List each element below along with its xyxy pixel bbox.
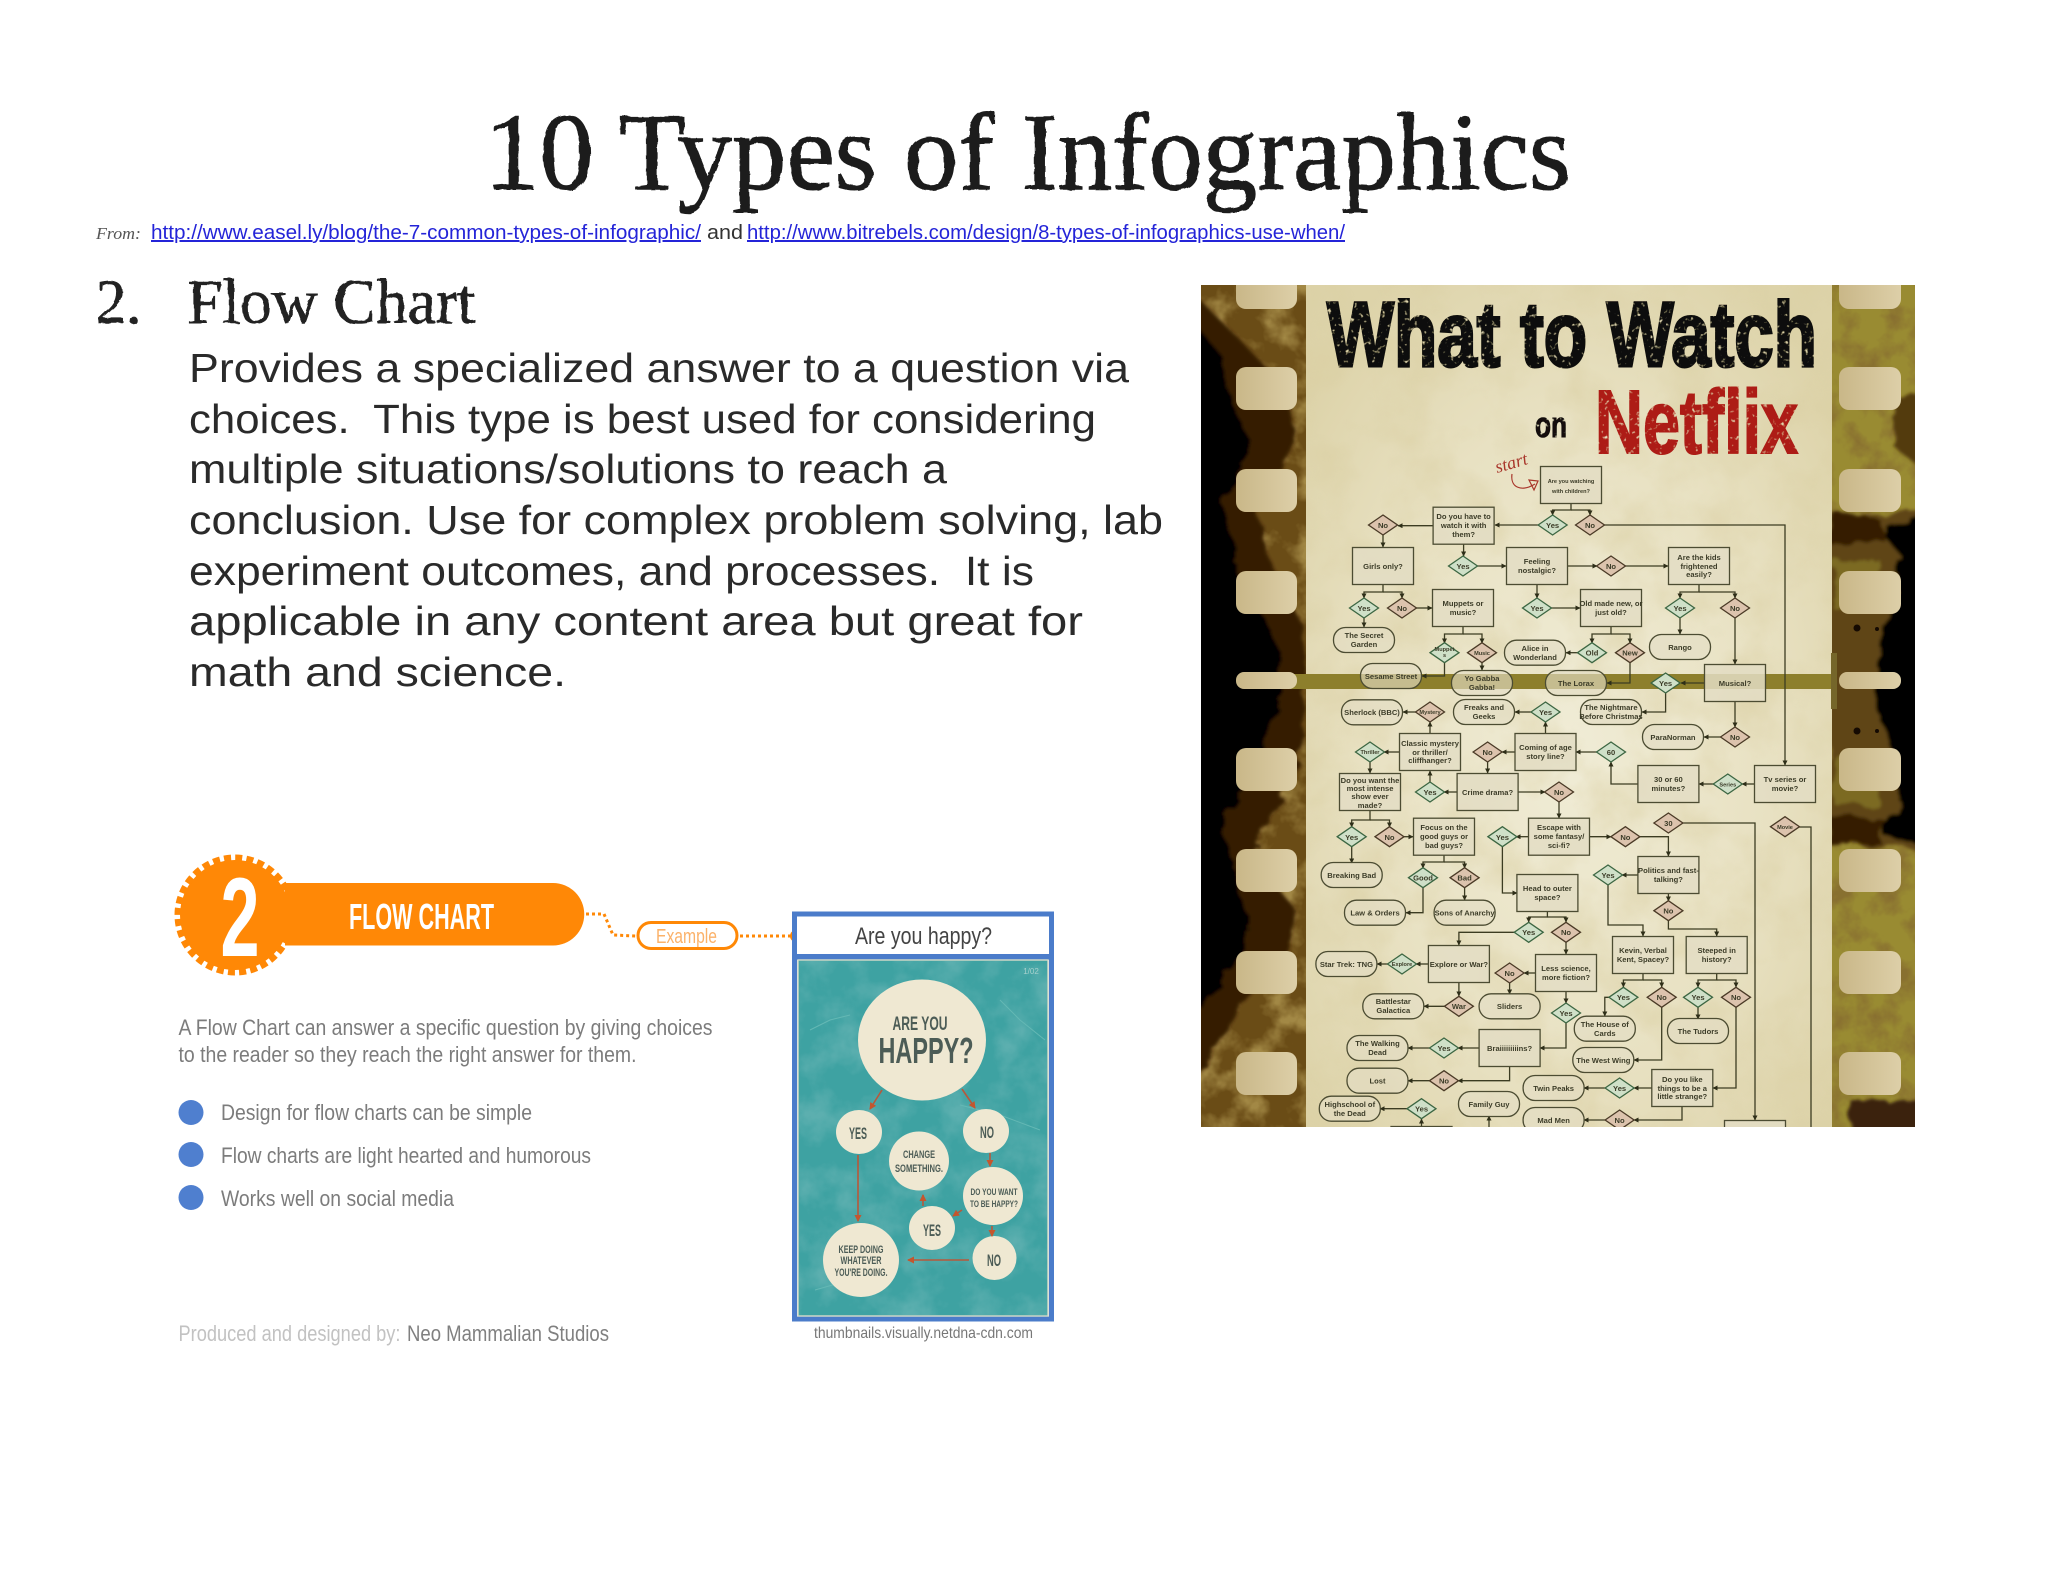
panel: flow chart explainer (178, 855, 1052, 1346)
flow chart: nodes: nostalgic? (1518, 566, 1556, 575)
flow chart: nodes: No (1657, 993, 1667, 1002)
flow chart: nodes: Alice in (1521, 644, 1549, 653)
flow chart: nodes: Yes (1415, 1104, 1428, 1114)
flow chart: nodes: Yes (1539, 708, 1552, 717)
flow chart: nodes: 30 (1664, 819, 1673, 828)
flow chart: nodes: Yes (1423, 788, 1437, 797)
flow chart: nodes: No (1731, 993, 1741, 1002)
callout: example pill: Example (656, 926, 717, 948)
flow chart: connectors (1352, 503, 1811, 1135)
flow poster labels: KEEP DOING (838, 1244, 884, 1256)
flow chart: nodes: just old? (1594, 608, 1627, 617)
source line with links (95, 222, 1345, 244)
flow chart: nodes: Yes (1691, 993, 1705, 1002)
title: 10 Types of Infographics (485, 91, 1571, 213)
flow chart: nodes: Freaks and (1464, 703, 1504, 712)
flow chart: nodes: story line? (1526, 752, 1565, 761)
body text: choices. This type is best used for considering (189, 396, 1096, 442)
flow chart: nodes: them? (1452, 530, 1475, 539)
body text: experiment outcomes, and processes. It is (189, 548, 1034, 594)
flow chart: nodes: history? (1702, 955, 1732, 964)
flow chart: nodes: War (1452, 1002, 1466, 1011)
body text: applicable in any content area but great for (189, 598, 1083, 644)
example poster: are you happy (794, 914, 1052, 1319)
flow chart: nodes: No (1554, 788, 1564, 797)
flow chart: nodes: sci-fi? (1548, 841, 1571, 850)
flow chart: nodes: The West Wing (1576, 1056, 1631, 1065)
flow chart: nodes: The Lorax (1558, 679, 1595, 688)
panel: what to watch on netflix poster (1190, 265, 1925, 1164)
bullet list: Flow charts are light hearted and humorous (221, 1143, 591, 1168)
flow poster labels: SOMETHING. (895, 1163, 943, 1175)
flow chart: nodes: 60 (1607, 748, 1615, 757)
flow chart: nodes: Yes (1659, 679, 1672, 688)
flow chart: nodes: show ever (1351, 792, 1389, 801)
flow chart: nodes: The Secret (1345, 631, 1384, 640)
flow chart: nodes: things to be a (1658, 1084, 1708, 1093)
badge: number 2 starburst and bar: 2 (220, 855, 260, 980)
description text: to the reader so they reach the right answer for them. (178, 1042, 636, 1067)
source line with links: http://www.easel.ly/blog/the-7-common-types-of-infographic/ (151, 222, 701, 244)
flow chart: nodes: No (1615, 1116, 1625, 1125)
flow chart: nodes: Sliders (1497, 1002, 1522, 1011)
flow chart: nodes: No (1505, 969, 1515, 978)
flow chart: nodes: Star Trek: TNG (1320, 960, 1373, 969)
description text (178, 1015, 712, 1067)
flow chart: nodes: Braiiiiiiiiins? (1487, 1044, 1533, 1053)
body text (189, 345, 1163, 695)
flow poster labels: YES (923, 1221, 941, 1240)
badge: number 2 starburst and bar: FLOW CHART (349, 896, 494, 937)
flow chart: nodes: music? (1450, 608, 1477, 617)
description text: A Flow Chart can answer a specific question by giving choices (178, 1015, 712, 1040)
flow chart: nodes: Musical? (1719, 679, 1752, 688)
flow chart: nodes: No (1483, 748, 1493, 757)
flow poster labels: ARE YOU (892, 1014, 948, 1035)
flow chart: nodes: movie? (1772, 784, 1799, 793)
flow chart: nodes: Battlestar (1376, 997, 1411, 1006)
flow chart: nodes: Garden (1351, 640, 1378, 649)
flow chart: nodes: little strange? (1657, 1092, 1708, 1101)
source line with links: From: (95, 224, 141, 243)
flow chart: nodes: with children? (1551, 489, 1591, 495)
flow chart: nodes: The Tudors (1678, 1027, 1718, 1036)
image source caption: thumbnails.visually.netdna-cdn.com (814, 1325, 1033, 1342)
heading: 2. Flow Chart: 2. (96, 266, 141, 337)
flow chart: nodes: No (1730, 733, 1740, 742)
flow chart: nodes: New (1622, 648, 1638, 658)
flow chart: nodes: Movie (1777, 825, 1793, 831)
flow chart: nodes: Yes (1522, 928, 1535, 937)
flow chart: nodes: Bad (1457, 874, 1472, 882)
flow chart: nodes: most intense (1347, 784, 1393, 793)
flow poster labels: CHANGE (903, 1149, 935, 1161)
flow chart: nodes: easily? (1686, 570, 1712, 579)
film sprocket holes (1236, 265, 1901, 1095)
flow chart: nodes: Music (1474, 651, 1490, 657)
flow chart: nodes: Sherlock (BBC) (1344, 708, 1400, 717)
flow chart: nodes: cliffhanger? (1408, 756, 1452, 765)
flow chart: nodes: space? (1534, 893, 1561, 902)
flow chart: nodes: Thriller (1361, 750, 1380, 756)
flow chart: nodes: Mystery (1419, 710, 1441, 716)
flow poster labels: TO BE HAPPY? (970, 1199, 1018, 1209)
heading: 2. Flow Chart: Flow Chart (187, 266, 475, 337)
flow chart: nodes: Good (1413, 874, 1433, 882)
flow chart: nodes: Lost (1369, 1076, 1386, 1086)
flow chart: nodes: Highschool of (1324, 1100, 1376, 1109)
flow chart: nodes: Do you like (1662, 1075, 1703, 1084)
flow chart: nodes: frightened (1680, 562, 1718, 571)
flow chart: nodes: Kevin, Verbal (1619, 946, 1667, 955)
flow chart: nodes: Gabba! (1469, 683, 1495, 692)
flow chart: nodes: Less science, (1541, 964, 1591, 973)
flow chart: nodes: Yes (1617, 993, 1630, 1002)
body text: math and science. (189, 649, 566, 695)
bullet list: Works well on social media (221, 1186, 455, 1211)
flow chart: nodes: Are you watching (1548, 479, 1595, 485)
flow chart: nodes: Yes (1357, 604, 1371, 613)
flow chart: nodes: No (1730, 604, 1740, 613)
flow chart: nodes: s (1443, 653, 1446, 659)
flow poster nodes (823, 980, 1023, 1297)
flow poster labels: YES (849, 1124, 867, 1143)
flow chart: nodes: No (1439, 1076, 1449, 1086)
flow chart: nodes: No (1620, 833, 1631, 842)
credit (178, 1321, 609, 1346)
flow chart: nodes: 30 or 60 (1654, 775, 1683, 784)
flow chart: nodes: Explore or War? (1430, 960, 1488, 969)
flow poster labels: WHATEVER (840, 1255, 882, 1267)
flow chart: nodes: No (1378, 521, 1388, 530)
flow poster labels: HAPPY? (878, 1030, 974, 1071)
flow chart: nodes: Classic mystery (1401, 739, 1460, 748)
flow chart: nodes: Yes (1530, 604, 1544, 613)
flow chart: nodes: No (1384, 833, 1395, 842)
flow chart: nodes: Twin Peaks (1533, 1084, 1574, 1093)
flow chart: nodes: or thriller/ (1412, 748, 1449, 757)
flow chart: nodes: Yes (1673, 604, 1687, 613)
flow chart: nodes: Tv series or (1764, 775, 1806, 784)
badge: number 2 starburst and bar (178, 855, 584, 980)
flow chart: nodes: Kent, Spacey? (1617, 955, 1670, 964)
flow poster labels: YOU'RE DOING. (834, 1267, 888, 1279)
flow chart: nodes: the Dead (1334, 1109, 1366, 1118)
flow chart: nodes: some fantasy/ (1534, 832, 1585, 841)
flow chart: nodes: Are the kids (1677, 553, 1721, 562)
flow chart: nodes: Girls only? (1363, 562, 1403, 571)
flow chart: nodes: good guys or (1420, 832, 1468, 841)
flow chart: nodes: Dead (1368, 1048, 1387, 1057)
flow chart: nodes: Do you want the (1341, 776, 1399, 785)
flow chart: nodes: made? (1358, 801, 1383, 810)
credit: Neo Mammalian Studios (407, 1321, 609, 1346)
start annotation (1496, 454, 1539, 492)
flow chart: nodes: Sesame Street (1365, 672, 1418, 681)
start annotation: start (1493, 448, 1531, 477)
poster title: What to Watch (1327, 284, 1817, 386)
poster title: Netflix (1595, 373, 1798, 473)
flow chart: nodes: The House of (1581, 1020, 1629, 1029)
flow chart: nodes: Cards (1594, 1029, 1616, 1038)
flow chart: nodes: Before Christmas (1579, 712, 1643, 721)
flow chart: nodes: Yes (1559, 1009, 1573, 1018)
flow chart: nodes: Law & Orders (1350, 908, 1400, 918)
flow chart: nodes: Sons of Anarchy (1435, 908, 1495, 918)
flow chart: nodes: Geeks (1473, 712, 1495, 721)
flow poster labels: DO YOU WANT (970, 1187, 1018, 1197)
example poster: are you happy: Are you happy? (855, 923, 992, 950)
flow chart: nodes: Breaking Bad (1327, 871, 1377, 880)
flow chart: nodes: No (1397, 604, 1407, 613)
credit: Produced and designed by: (178, 1321, 400, 1346)
flow chart: nodes: Crime drama? (1462, 788, 1513, 797)
flow chart: nodes: Yes (1496, 833, 1509, 842)
flow chart: nodes (1316, 466, 1816, 1164)
poster title (1326, 298, 1814, 455)
flow chart: nodes: Politics and fast- (1638, 866, 1699, 875)
flow chart: nodes: watch it with (1440, 521, 1487, 530)
flow chart: nodes: bad guys? (1425, 841, 1463, 850)
example poster: are you happy: 1/02 (1023, 967, 1039, 976)
flow chart: nodes: Yes (1613, 1084, 1626, 1093)
flow chart: nodes: Feeling (1524, 557, 1551, 566)
poster title: on (1535, 404, 1567, 445)
flow chart: nodes: Wonderland (1513, 653, 1557, 662)
flow poster arrows (858, 1089, 992, 1260)
flow chart: nodes: Yo Gabba (1465, 674, 1500, 683)
flow chart: nodes: Old (1586, 648, 1599, 658)
source line with links: http://www.bitrebels.com/design/8-types-of-infographics-use-when/ (747, 222, 1345, 244)
flow chart: nodes: Muppet (1435, 647, 1455, 653)
flow chart: nodes: Explore (1392, 962, 1412, 968)
flow chart: nodes: Galactica (1376, 1006, 1411, 1015)
film strip right (1832, 285, 1915, 1127)
flow chart: nodes: Yes (1546, 521, 1559, 530)
icon: connector dot (790, 930, 802, 942)
flow chart: nodes: No (1585, 521, 1595, 530)
flow chart: nodes: The Walking (1355, 1039, 1400, 1048)
flow chart: nodes: Steeped in (1697, 946, 1736, 955)
flow chart: nodes: Muppets or (1443, 599, 1484, 608)
body text: Provides a specialized answer to a question via (189, 345, 1129, 391)
flow chart: nodes: Family Guy (1469, 1100, 1510, 1109)
flow chart: nodes: Series (1719, 782, 1736, 788)
flow chart: nodes: Yes (1456, 562, 1470, 571)
flow poster labels: NO (980, 1123, 994, 1142)
flow chart: nodes: No (1561, 928, 1571, 937)
body text: multiple situations/solutions to reach a (189, 446, 947, 492)
flow chart: nodes: Escape with (1537, 823, 1581, 832)
flow poster labels (834, 1014, 1018, 1279)
connector: dotted line to example (586, 914, 792, 936)
flow poster labels: NO (987, 1251, 1001, 1270)
flow chart: nodes: Yes (1345, 833, 1358, 842)
flow chart: nodes: Do you have to (1436, 512, 1491, 521)
source line with links: and (707, 222, 743, 244)
flow chart: nodes: Head to outer (1523, 884, 1572, 893)
flow chart: nodes: Old made new, or (1579, 599, 1643, 608)
flow chart: nodes: Yes (1601, 871, 1615, 880)
flow chart: nodes: Rango (1668, 643, 1692, 652)
flow chart: nodes: Focus on the (1420, 823, 1468, 832)
flow chart: nodes: Coming of age (1519, 743, 1572, 752)
body text: conclusion. Use for complex problem solving, lab (189, 497, 1163, 543)
flow chart: nodes: No (1663, 906, 1674, 916)
flow chart: nodes: ParaNorman (1650, 733, 1696, 742)
flow chart: nodes: minutes? (1652, 784, 1686, 793)
bullet list: Design for flow charts can be simple (221, 1100, 532, 1125)
bullet list (178, 1100, 591, 1211)
flow chart: nodes: talking? (1654, 875, 1683, 884)
flow chart: nodes: The Nightmare (1584, 703, 1638, 712)
flow chart: nodes: No (1606, 562, 1616, 571)
flow chart: nodes: Mad Men (1537, 1116, 1570, 1125)
paper background (1290, 285, 1837, 1127)
film strip left (1190, 285, 1306, 1127)
flow chart: nodes: Yes (1437, 1044, 1451, 1053)
callout: example pill (638, 922, 737, 948)
flow chart: nodes: more fiction? (1542, 973, 1590, 982)
